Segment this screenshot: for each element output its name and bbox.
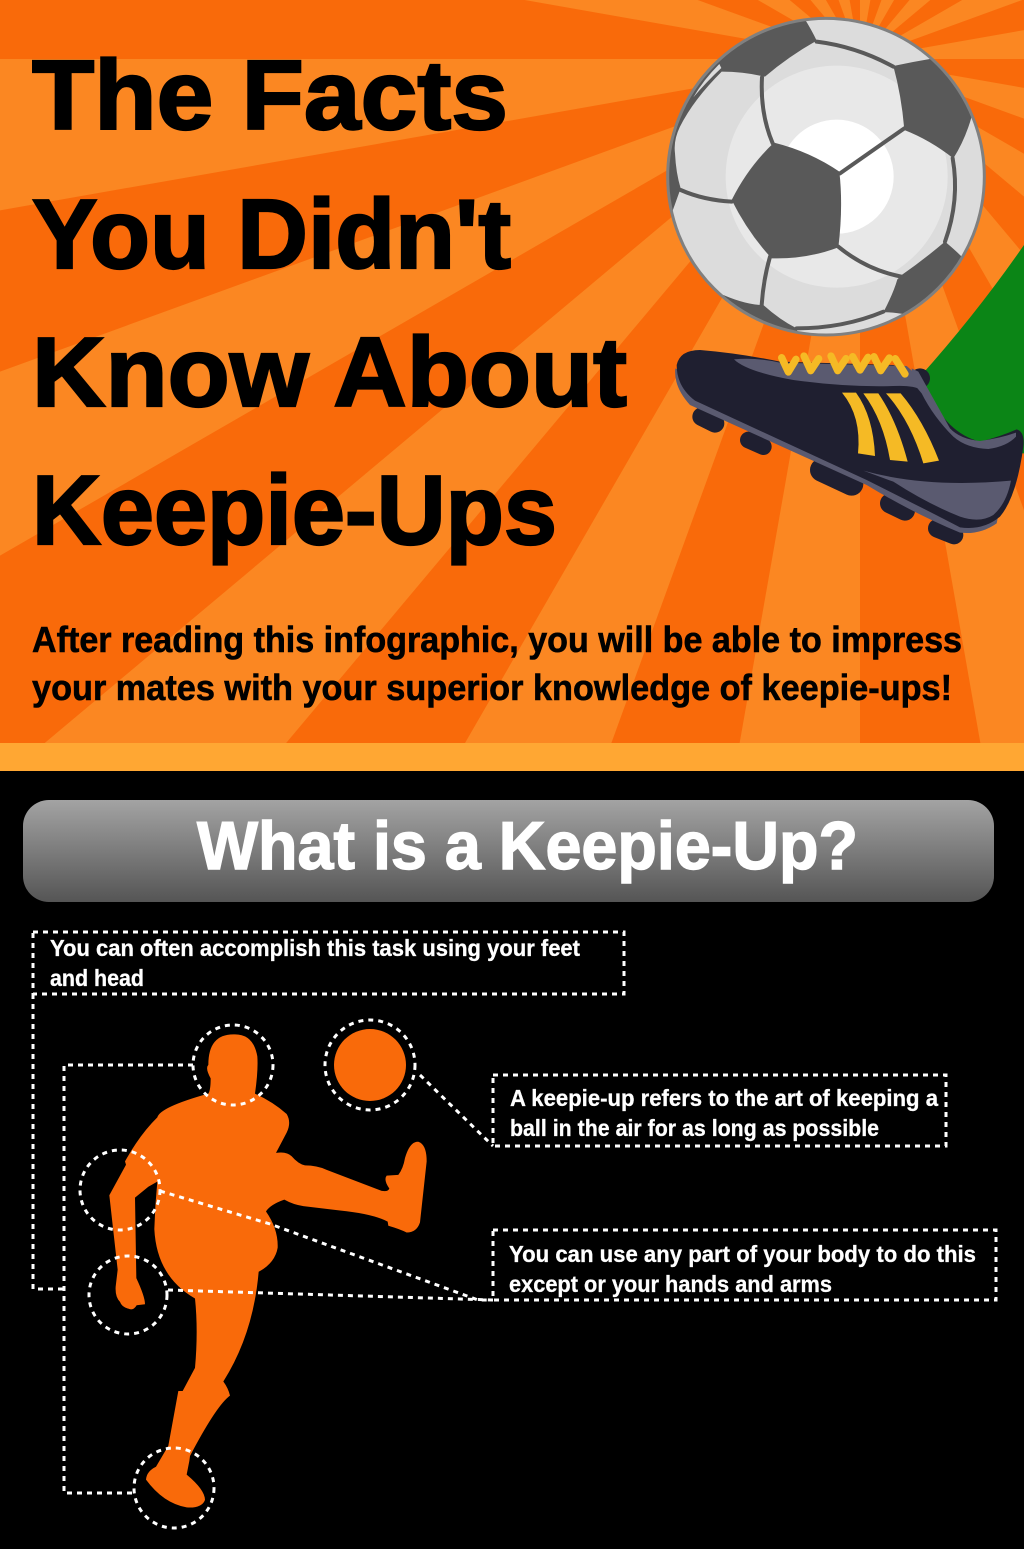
section heading bar (23, 800, 994, 902)
callout: body parts: except or your hands and arms (509, 1271, 832, 1297)
callout: feet and head: You can often accomplish this task using your feet (50, 935, 580, 961)
title: You Didn't (32, 179, 511, 289)
intro text (32, 619, 962, 708)
callout: definition: A keepie-up refers to the art of keeping a (510, 1085, 939, 1111)
intro text: After reading this infographic, you will be able to impress (32, 619, 962, 660)
icon: green sock leg (920, 245, 1024, 453)
orange divider band (0, 743, 1024, 771)
title: The Facts (32, 40, 508, 150)
player silhouette (109, 1034, 427, 1508)
title: Keepie-Ups (32, 455, 557, 565)
ball silhouette (334, 1029, 406, 1101)
intro text: your mates with your superior knowledge of keepie-ups! (32, 667, 952, 708)
callout: feet and head (33, 932, 624, 994)
callout: body parts (493, 1230, 996, 1300)
icon: football boot (675, 350, 1024, 535)
title: Know About (32, 317, 627, 427)
callout: body parts: You can use any part of your body to do this (509, 1241, 976, 1267)
icon: football (653, 17, 993, 347)
callout: definition (493, 1075, 946, 1146)
title (32, 40, 627, 565)
section heading bar: What is a Keepie-Up? (197, 808, 858, 884)
callout: feet and head: and head (50, 965, 144, 991)
hero sunburst background (0, 0, 1024, 743)
dashed highlight circles and leader lines (33, 994, 493, 1528)
callout: definition: ball in the air for as long as possible (510, 1115, 879, 1141)
